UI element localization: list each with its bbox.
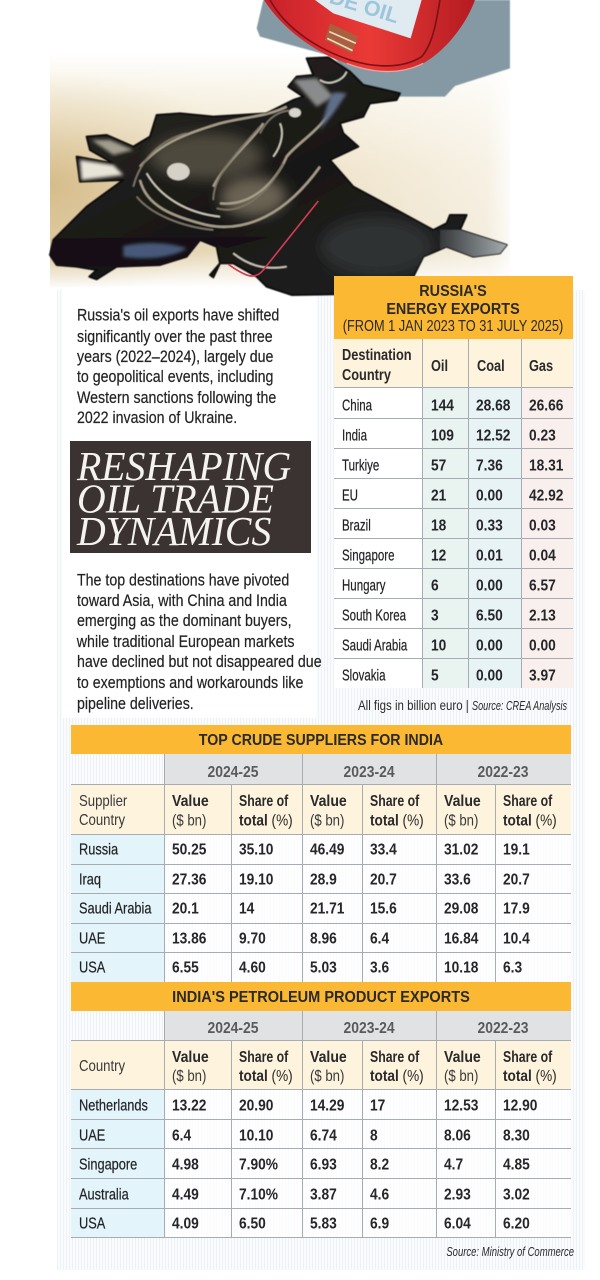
table rows: 0.00 <box>476 487 503 505</box>
table rows: 0.00 <box>476 667 503 685</box>
column headers: Oil <box>431 358 448 375</box>
column headers: Share of <box>239 1049 288 1066</box>
column headers: Coal <box>477 358 505 375</box>
column headers <box>342 347 553 384</box>
table heading: RUSSIA'S <box>419 282 487 300</box>
column headers: Country <box>79 812 126 829</box>
column headers: Value <box>310 792 347 810</box>
body text block: to exemptions and workarounds like <box>77 674 304 692</box>
table rows <box>79 841 530 977</box>
table rows: 14 <box>239 900 255 918</box>
title: Reshaping Oil Trade Dynamics: DYNAMICS <box>76 508 271 554</box>
drum spout <box>325 23 358 53</box>
table rows: 10.10 <box>239 1127 273 1145</box>
table rows: 33.4 <box>370 841 397 859</box>
table rows: 3.02 <box>503 1186 530 1204</box>
year headers: 2024-25 <box>207 1019 259 1037</box>
table rows: USA <box>79 1215 106 1233</box>
table rows: 35.10 <box>239 841 273 859</box>
table rows: 3.97 <box>529 667 556 685</box>
table rows: 46.49 <box>310 841 344 859</box>
table rows: 17 <box>370 1097 385 1115</box>
table rows: 8.06 <box>444 1127 471 1145</box>
table rows: 4.85 <box>503 1156 530 1174</box>
intro text block: Russia's oil exports have shifted <box>77 306 279 325</box>
column headers: Value <box>444 1048 481 1066</box>
table rows: 12.53 <box>444 1097 478 1115</box>
table heading: (FROM 1 JAN 2023 TO 31 JULY 2025) <box>343 318 563 335</box>
table rows: 6.50 <box>476 607 503 625</box>
source note: Source: Ministry of Commerce <box>446 1246 574 1259</box>
table rows: 19.10 <box>239 871 273 889</box>
table rows: 4.49 <box>172 1186 199 1204</box>
column headers: Destination <box>342 347 412 364</box>
table heading <box>71 982 571 1011</box>
table rows: 3 <box>431 607 439 625</box>
column headers: Share of <box>370 793 419 810</box>
table rows: 6.50 <box>239 1215 266 1233</box>
table rows: 7.90% <box>239 1156 278 1174</box>
column headers: Share of <box>503 1049 552 1066</box>
column headers: Country <box>342 367 391 384</box>
drum label <box>315 0 422 38</box>
year headers <box>207 1019 529 1037</box>
table rows: 6.04 <box>444 1215 471 1233</box>
column headers: total (%) <box>370 1068 424 1085</box>
table rows: 4.7 <box>444 1156 463 1174</box>
panel: Russia's energy exports table <box>334 276 573 713</box>
body text block: The top destinations have pivoted <box>77 571 289 590</box>
body text block: pipeline deliveries. <box>77 695 194 713</box>
table rows: 3.6 <box>370 959 389 977</box>
table rows: 4.09 <box>172 1215 199 1233</box>
table rows: 2.13 <box>529 607 556 625</box>
column headers <box>79 792 557 830</box>
table rows: USA <box>79 959 106 977</box>
table backgrounds and grid <box>71 754 571 982</box>
table heading: INDIA'S PETROLEUM PRODUCT EXPORTS <box>172 988 470 1006</box>
table rows: Singapore <box>79 1156 137 1174</box>
table rows: 4.6 <box>370 1186 389 1204</box>
body text block: toward Asia, with China and India <box>77 592 287 610</box>
table rows: 21 <box>431 487 446 505</box>
table rows: 5.83 <box>310 1215 337 1233</box>
striped page backing <box>57 290 585 1270</box>
table footnote: All figs in billion euro | <box>358 697 469 713</box>
table rows: 6.4 <box>172 1127 192 1145</box>
table rows: 6 <box>431 577 439 595</box>
column headers: total (%) <box>239 1068 293 1085</box>
table rows: 10.4 <box>503 930 530 948</box>
table rows: 0.00 <box>476 577 503 595</box>
column headers: Value <box>172 1048 209 1066</box>
drum shadow <box>257 0 510 97</box>
table rows: 0.33 <box>476 517 503 535</box>
table rows: 0.01 <box>476 547 503 565</box>
table rows: 20.7 <box>370 871 397 889</box>
table rows: 6.74 <box>310 1127 337 1145</box>
table rows: India <box>342 426 367 444</box>
column headers: ($ bn) <box>310 1068 344 1085</box>
table rows: 19.1 <box>503 841 530 859</box>
table rows: 6.9 <box>370 1215 389 1233</box>
table rows: 0.00 <box>529 637 556 655</box>
panel: top crude suppliers for India table <box>71 725 571 982</box>
table rows: 28.68 <box>476 397 510 415</box>
table rows: 6.55 <box>172 959 199 977</box>
column headers: ($ bn) <box>310 813 344 830</box>
column headers: Share of <box>370 1049 419 1066</box>
table rows: 18.31 <box>529 457 563 475</box>
table footnote: Source: CREA Analysis <box>472 700 568 713</box>
table rows: 26.66 <box>529 397 563 415</box>
table rows: Turkiye <box>342 456 380 474</box>
intro text block: significantly over the past three <box>77 328 273 346</box>
column headers: Share of <box>239 793 288 810</box>
intro text block: to geopolitical events, including <box>77 368 273 386</box>
table rows: South Korea <box>342 606 406 624</box>
year headers: 2023-24 <box>344 763 395 781</box>
table rows: Brazil <box>342 516 371 534</box>
table rows: 4.60 <box>239 959 266 977</box>
table rows: 20.1 <box>172 900 199 918</box>
table heading: ENERGY EXPORTS <box>386 300 520 318</box>
table rows: 5.03 <box>310 959 337 977</box>
column headers: Supplier <box>79 793 128 810</box>
table rows: 15.6 <box>370 900 397 918</box>
table rows: 28.9 <box>310 871 337 889</box>
table rows: 3.87 <box>310 1186 337 1204</box>
table rows: 144 <box>431 397 455 415</box>
table rows: 27.36 <box>172 871 206 889</box>
table rows: EU <box>342 486 358 504</box>
table rows: 16.84 <box>444 930 479 948</box>
title: Reshaping Oil Trade Dynamics: RESHAPING <box>76 443 291 489</box>
table rows: 18 <box>431 517 446 535</box>
table rows: 50.25 <box>172 841 206 859</box>
table rows: 0.00 <box>476 637 503 655</box>
title: Reshaping Oil Trade Dynamics: OIL TRADE <box>77 476 274 522</box>
table rows: 42.92 <box>529 487 563 505</box>
table rows: 7.10% <box>239 1186 278 1204</box>
table rows: 7.36 <box>476 457 503 475</box>
table rows: 0.03 <box>529 517 556 535</box>
table rows: China <box>342 396 372 414</box>
table rows <box>342 396 563 685</box>
table rows: 8.30 <box>503 1127 530 1145</box>
table rows: 12.52 <box>476 427 510 445</box>
table rows: 33.6 <box>444 871 471 889</box>
table rows: 10.18 <box>444 959 478 977</box>
table rows: 57 <box>431 457 446 475</box>
column headers: total (%) <box>503 1068 557 1085</box>
table rows: 6.4 <box>370 930 390 948</box>
table rows: 0.04 <box>529 547 556 565</box>
illustration: oil drum spilling into oil-slick map of India <box>47 0 510 295</box>
column headers: ($ bn) <box>444 1068 478 1085</box>
column headers: total (%) <box>370 813 424 830</box>
red annotation arrow line <box>228 201 318 276</box>
icon: red oil drum <box>264 0 475 71</box>
sand ground <box>50 52 510 287</box>
year headers: 2022-23 <box>477 763 529 781</box>
column headers: ($ bn) <box>172 1068 206 1085</box>
table rows: 8 <box>370 1127 378 1145</box>
table rows: Australia <box>79 1186 130 1204</box>
title: Reshaping Oil Trade Dynamics <box>70 441 311 554</box>
map of India as oil slick <box>47 57 510 295</box>
body text block: have declined but not disappeared due <box>77 653 322 671</box>
table rows: UAE <box>79 1127 106 1145</box>
column headers: total (%) <box>239 813 293 830</box>
column headers: ($ bn) <box>444 813 478 830</box>
table rows: Russia <box>79 841 119 859</box>
intro text block: Western sanctions following the <box>77 389 277 407</box>
table rows: 9.70 <box>239 930 266 948</box>
table rows: 29.08 <box>444 900 478 918</box>
body text block <box>76 571 322 713</box>
table rows: 17.9 <box>503 900 530 918</box>
column headers: Value <box>172 792 209 810</box>
column headers: Value <box>310 1048 347 1066</box>
column headers: total (%) <box>503 813 557 830</box>
table rows: 20.7 <box>503 871 530 889</box>
year headers: 2024-25 <box>207 763 259 781</box>
intro text block <box>77 306 279 427</box>
table rows: 10 <box>431 637 446 655</box>
table rows: 20.90 <box>239 1097 273 1115</box>
body text block: while traditional European markets <box>76 633 295 651</box>
table rows: Slovakia <box>342 666 386 684</box>
table rows: 0.23 <box>529 427 556 445</box>
column headers: Gas <box>529 358 553 375</box>
column headers: Share of <box>503 793 552 810</box>
table rows: 31.02 <box>444 841 478 859</box>
column headers: ($ bn) <box>172 813 206 830</box>
table rows: 8.2 <box>370 1156 389 1174</box>
table rows: Hungary <box>342 576 386 594</box>
year headers: 2022-23 <box>477 1019 529 1037</box>
table rows: 13.86 <box>172 930 206 948</box>
table rows: UAE <box>79 930 106 948</box>
table rows: 6.57 <box>529 577 556 595</box>
table rows: Saudi Arabia <box>342 636 408 654</box>
panel: India's petroleum product exports table <box>71 982 574 1259</box>
table rows: Singapore <box>342 546 395 564</box>
table rows: Netherlands <box>79 1097 148 1115</box>
column headers: Country <box>79 1058 126 1075</box>
table heading: TOP CRUDE SUPPLIERS FOR INDIA <box>199 731 443 749</box>
column headers <box>79 1048 557 1085</box>
table rows: 6.93 <box>310 1156 337 1174</box>
table rows: 21.71 <box>310 900 344 918</box>
table backgrounds and grid <box>71 1011 571 1238</box>
table rows: 12.90 <box>503 1097 537 1115</box>
intro text block: 2022 invasion of Ukraine. <box>77 409 237 427</box>
year headers <box>207 763 529 781</box>
table footnote <box>358 697 568 713</box>
table rows: 2.93 <box>444 1186 471 1204</box>
body text block: emerging as the dominant buyers, <box>77 612 292 630</box>
intro text block: years (2022–2024), largely due <box>77 348 274 366</box>
table rows: 12 <box>431 547 446 565</box>
table rows: Saudi Arabia <box>79 900 152 918</box>
table backgrounds and grid <box>334 339 573 688</box>
table rows: Iraq <box>79 871 101 889</box>
table rows: 6.20 <box>503 1215 530 1233</box>
table rows: 6.3 <box>503 959 522 977</box>
table rows <box>79 1097 537 1233</box>
table rows: 13.22 <box>172 1097 206 1115</box>
year headers: 2023-24 <box>344 1019 395 1037</box>
table rows: 109 <box>431 427 454 445</box>
column headers: Value <box>444 792 481 810</box>
table rows: 5 <box>431 667 439 685</box>
table rows: 14.29 <box>310 1097 344 1115</box>
table heading <box>71 725 571 754</box>
table rows: 4.98 <box>172 1156 199 1174</box>
table heading <box>334 276 573 339</box>
table rows: 8.96 <box>310 930 337 948</box>
